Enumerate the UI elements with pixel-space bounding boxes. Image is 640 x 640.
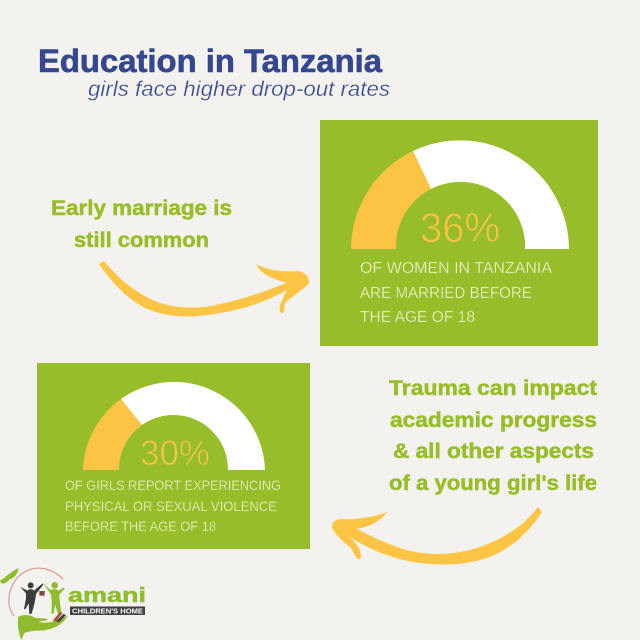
statistic: 36%: 36% — [420, 204, 500, 251]
panel: early marriage statistic — [320, 120, 598, 346]
panel caption: OF GIRLS REPORT EXPERIENCING — [65, 477, 281, 493]
panel caption — [360, 260, 552, 326]
gauge: 36 percent — [351, 140, 569, 249]
callout: trauma: & all other aspects — [393, 440, 594, 463]
panel caption: THE AGE OF 18 — [360, 309, 475, 326]
logo icon — [0, 568, 68, 640]
logo: Amani Children's Home — [0, 568, 146, 640]
callout: trauma — [389, 377, 597, 495]
subtitle: girls face higher drop-out rates — [88, 78, 391, 101]
panel caption: PHYSICAL OR SEXUAL VIOLENCE — [65, 498, 277, 514]
callout: trauma: academic progress — [390, 409, 597, 432]
callout: early marriage — [51, 197, 232, 252]
callout: early marriage: still common — [74, 229, 209, 252]
callout: trauma: Trauma can impact — [389, 377, 597, 400]
arrow: to early marriage panel — [99, 261, 309, 316]
gauge: 30 percent — [83, 382, 265, 470]
statistic: 30%: 30% — [140, 434, 210, 473]
callout: trauma: of a young girl's life — [389, 472, 597, 495]
logo wordmark: amani — [68, 585, 146, 607]
title: Education in Tanzania — [38, 43, 382, 79]
panel caption — [65, 477, 281, 534]
logo tagline: CHILDREN'S HOME — [72, 606, 143, 616]
panel: violence statistic — [37, 363, 310, 549]
callout: early marriage: Early marriage is — [51, 197, 232, 220]
arrow: to violence panel — [332, 507, 542, 565]
panel caption: OF WOMEN IN TANZANIA — [360, 260, 552, 277]
panel caption: ARE MARRIED BEFORE — [360, 285, 532, 302]
panel caption: BEFORE THE AGE OF 18 — [65, 518, 216, 534]
